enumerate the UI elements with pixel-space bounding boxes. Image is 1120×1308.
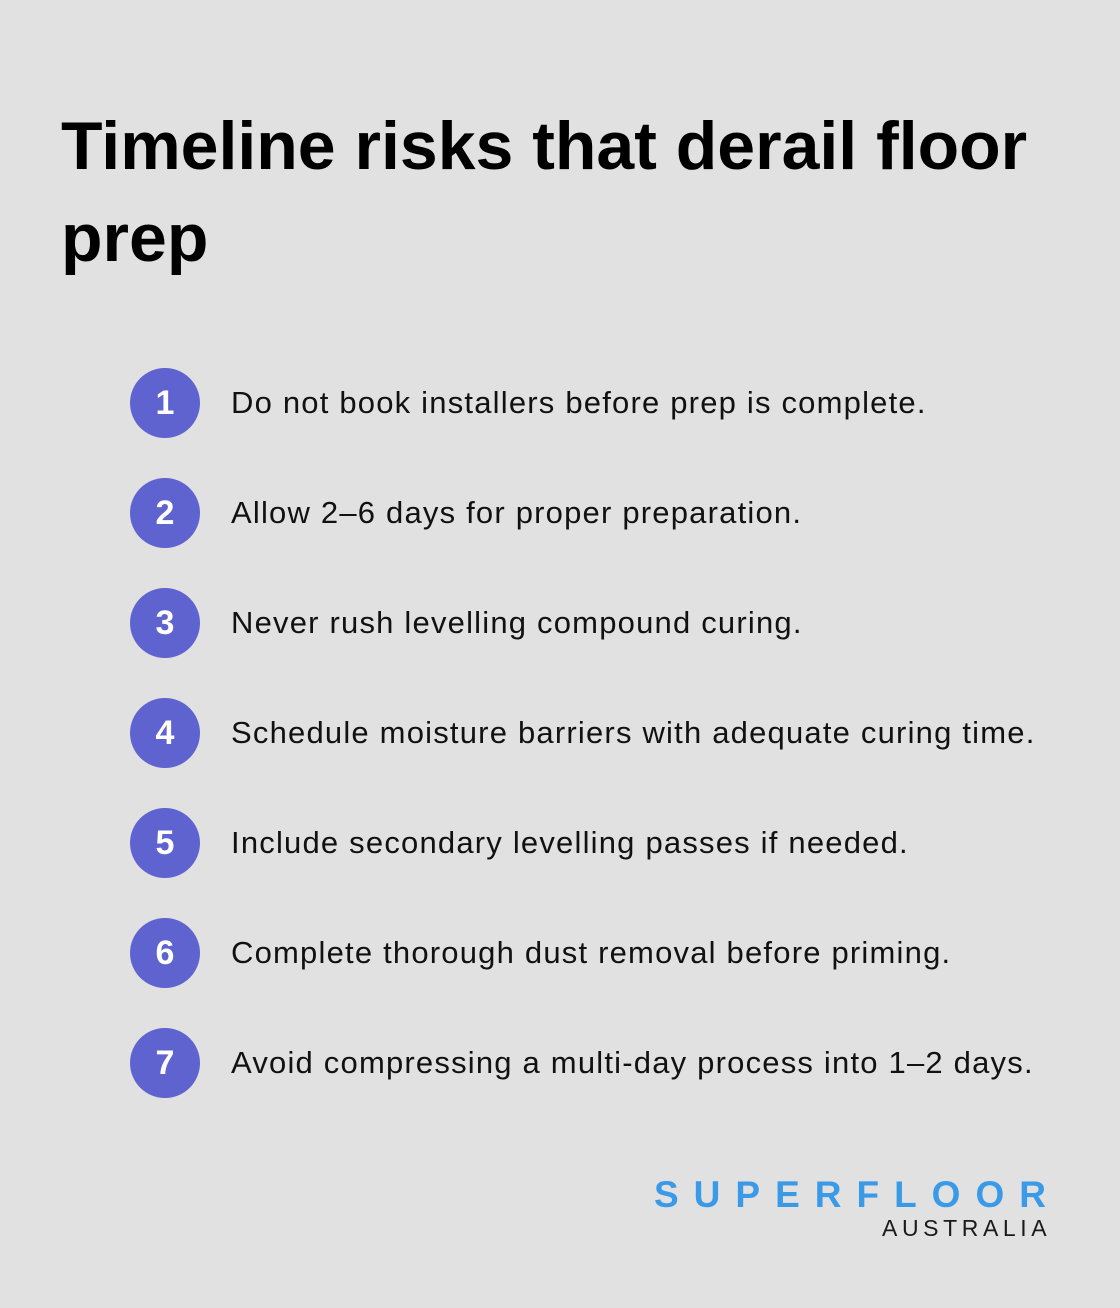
item 5: Include secondary levelling passes if needed. [231,825,909,860]
item 1 [130,368,927,438]
item 4 [130,698,1036,768]
item 3: 3 [156,604,174,642]
logo [654,1174,1061,1241]
item 6: Complete thorough dust removal before priming. [231,935,951,970]
item 6: 6 [156,934,174,972]
item 5: 5 [156,824,174,862]
item 7: 7 [156,1044,174,1082]
item 7: Avoid compressing a multi-day process into 1–2 days. [231,1045,1034,1080]
item 5 [130,808,909,878]
item 3 [130,588,803,658]
item 7 [130,1028,1034,1098]
logo: AUSTRALIA [882,1215,1051,1241]
item 6 [130,918,951,988]
logo: SUPERFLOOR [654,1174,1061,1215]
item 3: Never rush levelling compound curing. [231,605,803,640]
item 2: Allow 2–6 days for proper preparation. [231,495,802,530]
item 2: 2 [156,494,174,532]
item 4: 4 [156,714,174,752]
item 1: Do not book installers before prep is complete. [231,385,927,420]
title: Timeline risks that derail floor prep [61,108,1027,276]
item 1: 1 [156,384,174,422]
item 2 [130,478,802,548]
item 4: Schedule moisture barriers with adequate curing time. [231,715,1036,750]
